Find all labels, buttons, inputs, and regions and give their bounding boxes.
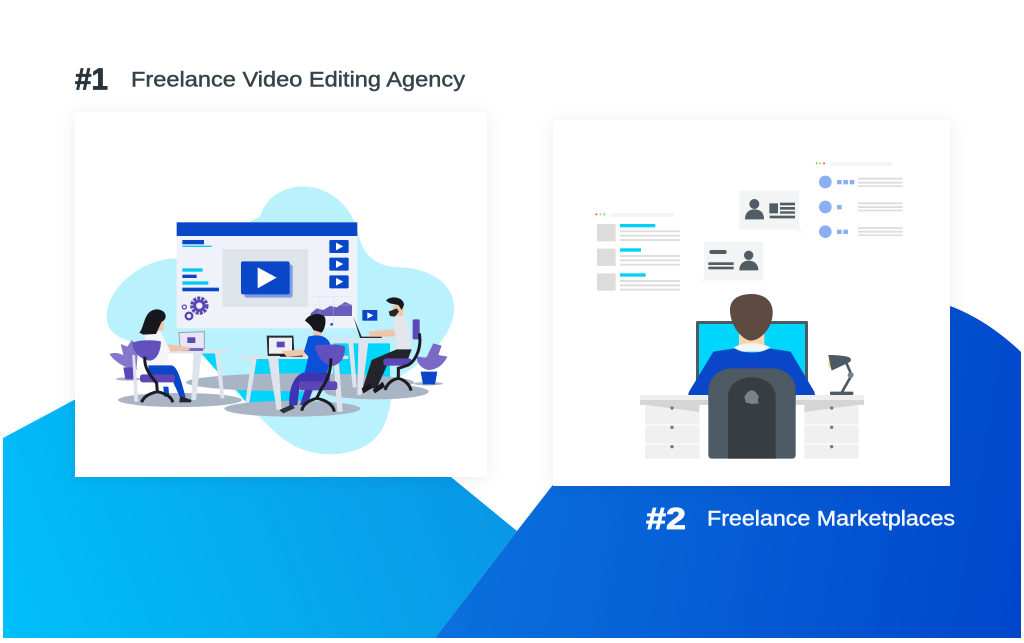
person: man with beard — [353, 297, 420, 393]
floating video icon — [362, 310, 377, 321]
heading: #1 Freelance Video Editing Agency: #1 — [75, 62, 108, 96]
video screen — [177, 222, 357, 328]
area chart — [311, 302, 352, 316]
desk — [640, 395, 864, 459]
heading: #1 Freelance Video Editing Agency — [75, 62, 465, 96]
person: woman at laptop — [132, 309, 204, 402]
chair — [708, 368, 796, 459]
panel: freelance video editing agency — [75, 112, 487, 477]
heading: #2 Freelance Marketplaces — [646, 501, 955, 536]
cyan floor stripes — [202, 343, 390, 403]
monitor — [696, 321, 808, 388]
background: dark blue shape — [435, 306, 1021, 638]
job list window — [595, 213, 680, 291]
floor shadows — [116, 373, 443, 417]
desk lamp — [828, 355, 854, 395]
heading: #2 Freelance Marketplaces: Freelance Marketplaces — [707, 506, 955, 530]
desk left — [163, 350, 229, 400]
person: man at center desk — [267, 314, 345, 413]
person from behind — [688, 294, 815, 400]
speech bubble: profile details — [697, 242, 763, 286]
profile list window — [816, 162, 903, 238]
plant left — [109, 340, 138, 379]
illustration: freelancer at desk — [595, 162, 903, 459]
heading: #2 Freelance Marketplaces: #2 — [646, 501, 686, 536]
panel: freelance marketplaces — [553, 120, 950, 486]
background blob — [107, 186, 454, 454]
speech bubble: profile card — [739, 191, 806, 235]
desk center — [240, 356, 348, 412]
gears — [182, 299, 206, 319]
illustration: team editing video — [107, 186, 454, 454]
plant right — [417, 343, 447, 384]
background: light blue shape — [3, 300, 517, 638]
heading: #1 Freelance Video Editing Agency: Freelance Video Editing Agency — [131, 68, 465, 92]
desk right — [332, 338, 392, 395]
